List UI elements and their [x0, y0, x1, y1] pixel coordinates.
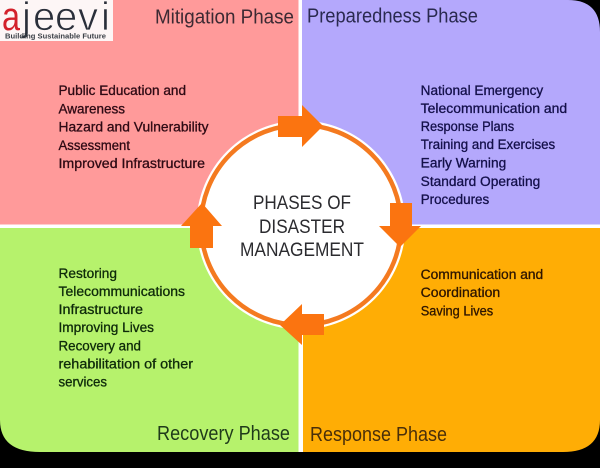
text block: mitigation items: Hazard and Vulnerability — [58, 120, 209, 134]
arrow: response to recovery — [280, 304, 324, 345]
heading: response phase: Response Phase — [310, 424, 447, 446]
logo: ajeevi — [0, 0, 113, 41]
panel: response phase — [303, 228, 600, 452]
center title: MANAGEMENT — [240, 240, 364, 261]
text block: preparedness items: Standard Operating — [421, 174, 540, 189]
text block: recovery items: Infrastructure — [58, 302, 143, 317]
text block: recovery items — [58, 266, 194, 390]
center title — [240, 193, 364, 261]
text block: preparedness items: National Emergency — [421, 83, 544, 98]
arrow: mitigation to preparedness — [278, 105, 323, 147]
text block: response items: Saving Lives — [421, 304, 493, 318]
text block: response items: Coordination — [421, 285, 500, 300]
panel: recovery phase — [0, 228, 298, 452]
heading: preparedness phase: Preparedness Phase — [307, 6, 478, 28]
text block: preparedness items: Response Plans — [421, 119, 514, 134]
text block: mitigation items: Assessment — [58, 138, 130, 153]
text block: preparedness items: Telecommunication and — [421, 101, 567, 116]
text block: mitigation items: Awareness — [58, 102, 125, 116]
panel: mitigation phase — [0, 0, 298, 224]
text block: recovery items: Restoring — [58, 266, 117, 281]
text block: preparedness items: Early Warning — [421, 156, 506, 170]
text block: mitigation items — [58, 83, 209, 171]
text block: preparedness items: Training and Exercises — [421, 137, 555, 152]
arrow: recovery to mitigation — [181, 203, 222, 248]
text block: recovery items: Improving Lives — [58, 320, 154, 335]
text block: preparedness items: Procedures — [421, 192, 489, 207]
text block: mitigation items: Public Education and — [58, 83, 186, 98]
central circle — [196, 120, 406, 330]
center title: DISASTER — [259, 217, 345, 238]
logo tagline: Building Sustainable Future — [5, 32, 106, 40]
text block: preparedness items — [421, 83, 567, 207]
panel: preparedness phase — [302, 0, 600, 224]
text block: recovery items: Recovery and — [58, 338, 141, 354]
center title: PHASES OF — [253, 193, 351, 214]
text block: recovery items: services — [58, 374, 107, 390]
text block: mitigation items: Improved Infrastructure — [58, 156, 205, 171]
text block: response items — [421, 267, 543, 318]
text block: recovery items: Telecommunications — [58, 284, 185, 299]
heading: mitigation phase: Mitigation Phase — [155, 6, 294, 28]
text block: recovery items: rehabilitation of other — [58, 356, 194, 372]
arrow: preparedness to response — [379, 203, 421, 247]
heading: recovery phase: Recovery Phase — [157, 423, 290, 445]
text block: response items: Communication and — [421, 267, 543, 282]
